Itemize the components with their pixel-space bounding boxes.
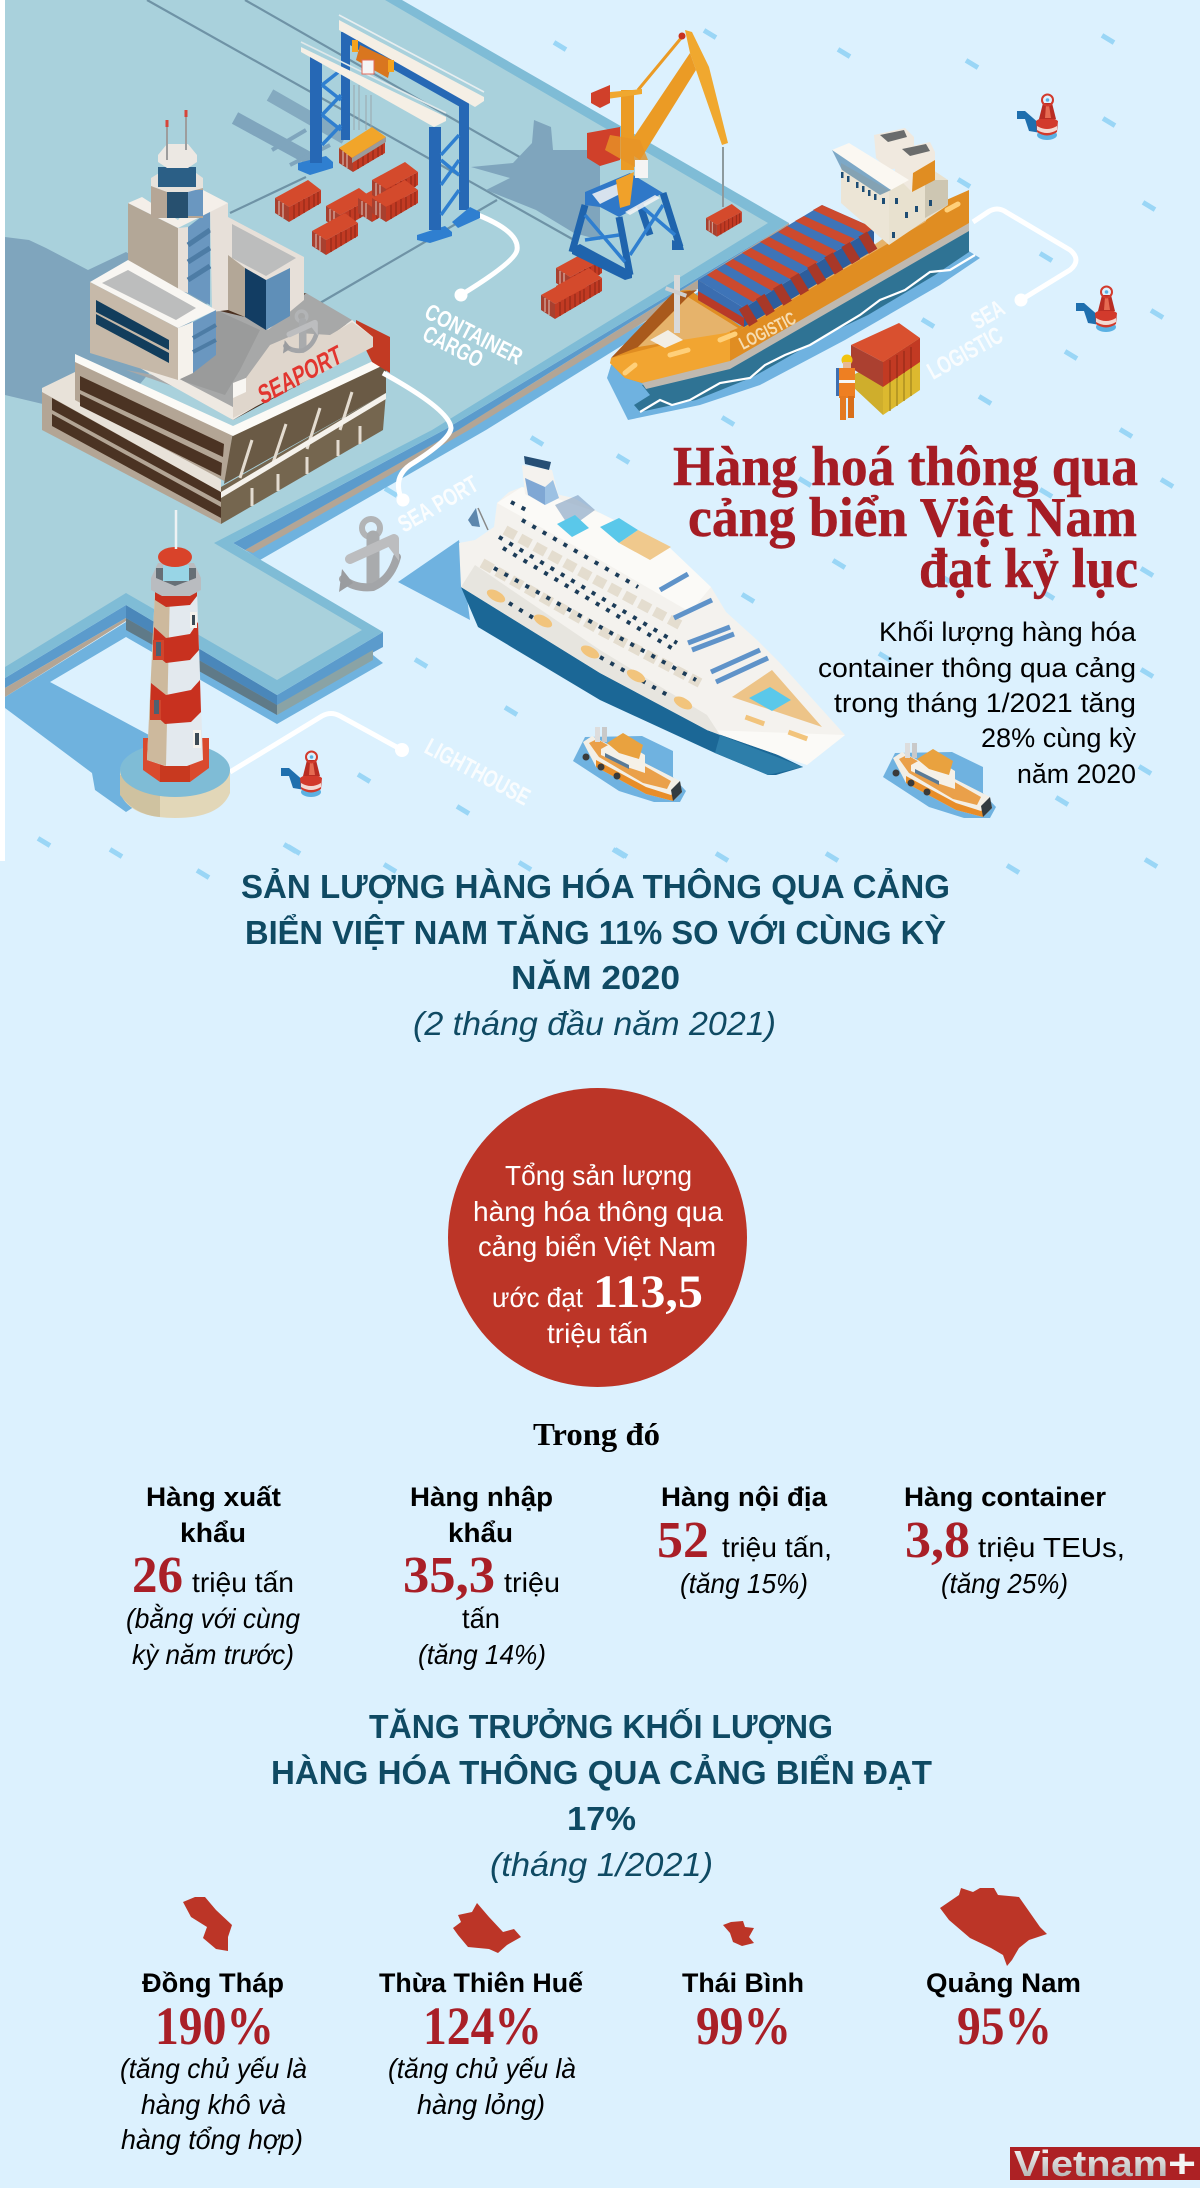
stat: export goods [126, 1482, 300, 1670]
stat: import goods: Hàng nhập [410, 1482, 553, 1512]
stat: Quang Nam: 95% [957, 1996, 1052, 2056]
stat: Thai Binh [682, 1921, 804, 2056]
icon: roof anchor [283, 311, 318, 354]
heading: main title: cảng biển Việt Nam [688, 487, 1137, 549]
label: lighthouse: LIGHTHOUSE [420, 733, 534, 811]
callout: total output circle: Tổng sản lượng [505, 1160, 692, 1191]
stat: Thua Thien Hue: hàng lỏng) [417, 2089, 545, 2120]
heading: growth section: HÀNG HÓA THÔNG QUA CẢNG BIỂN ĐẠT [271, 1753, 932, 1791]
heading: output section: SẢN LƯỢNG HÀNG HÓA THÔNG QUA CẢNG [241, 867, 950, 905]
heading: trong do: Trong đó [533, 1416, 660, 1452]
stat: Thai Binh: Thái Bình [682, 1968, 804, 1998]
stat: Thua Thien Hue: 124% [423, 1996, 542, 2056]
heading: main title: Hàng hoá thông qua [673, 436, 1138, 498]
heading: main title: đạt kỷ lục [919, 538, 1138, 600]
stat: Dong Thap: hàng khô và [141, 2089, 286, 2120]
text: SEAPORT sign: SEAPORT [255, 339, 345, 411]
stat: import goods: 35,3 [403, 1547, 495, 1604]
heading: output section: NĂM 2020 [511, 959, 680, 996]
sign facade [233, 322, 373, 418]
stat: export goods: Hàng xuất [146, 1482, 281, 1512]
lifeboats [485, 587, 694, 712]
stat: container goods: 3,8 [905, 1512, 970, 1569]
stat: import goods: triệu [504, 1567, 560, 1598]
window rows [494, 502, 696, 697]
label: lighthouse [230, 714, 534, 811]
main tower [128, 203, 178, 290]
stat: Dong Thap: hàng tổng hợp) [121, 2124, 303, 2155]
stat: Dong Thap: (tăng chủ yếu là [120, 2053, 307, 2084]
icon: Thua Thien Hue map [453, 1903, 521, 1953]
callout: total output circle: cảng biển Việt Nam [478, 1231, 716, 1262]
callout: total output circle: hàng hóa thông qua [473, 1196, 723, 1227]
icon: buoy lower [281, 752, 322, 797]
callout: total output circle: triệu tấn [547, 1318, 648, 1349]
stat: Thua Thien Hue [379, 1903, 584, 2120]
stat: domestic goods: 52 [657, 1512, 709, 1569]
stat: export goods: triệu tấn [192, 1567, 294, 1598]
stat: domestic goods: triệu tấn, [722, 1532, 832, 1563]
shadows on land [5, 95, 600, 420]
label: sea logistic: LOGISTIC [923, 322, 1008, 385]
stat: export goods: kỳ năm trước) [132, 1639, 294, 1670]
icon: seaport building [42, 110, 390, 524]
text block: intro: container thông qua cảng [818, 653, 1136, 683]
stat: container goods: Hàng container [904, 1482, 1107, 1512]
text: LOGISTIC hull lettering: LOGISTIC [736, 308, 799, 354]
stat: container goods [904, 1482, 1125, 1599]
crane legs [572, 190, 680, 275]
stat: domestic goods: (tăng 15%) [680, 1568, 808, 1599]
label: container cargo: CONTAINER [421, 298, 527, 370]
crane platform [585, 173, 663, 217]
stat: import goods: tấn [462, 1603, 500, 1634]
port land and quay [5, 0, 800, 812]
icon: lighthouse [120, 510, 230, 818]
stat: export goods: (bằng với cùng [126, 1603, 300, 1634]
upper tower [151, 183, 203, 218]
heading: growth section: 17% [567, 1800, 636, 1837]
heading: growth section: (tháng 1/2021) [490, 1846, 713, 1883]
logo: Vietnam+: + [1168, 2142, 1196, 2186]
stat: Dong Thap: Đồng Tháp [142, 1968, 284, 1998]
flag [468, 508, 480, 527]
icon: harbour crane [572, 30, 742, 280]
callout: total output circle: ước đạt [492, 1282, 583, 1313]
label: sea port [383, 373, 483, 538]
stat: Dong Thap: 190% [155, 1996, 274, 2056]
stat: export goods: khẩu [180, 1518, 246, 1548]
label: container cargo [419, 215, 527, 373]
rear block [228, 217, 304, 330]
icon: cargo ship [607, 128, 980, 420]
funnel [522, 465, 559, 505]
stat: Thai Binh: 99% [696, 1996, 791, 2056]
logo: Vietnam+ [1010, 2142, 1200, 2186]
stat: import goods: (tăng 14%) [418, 1639, 546, 1670]
icon: gantry crane [298, 15, 484, 243]
icon: cruise ship [398, 456, 845, 775]
stat: export goods: 26 [132, 1547, 183, 1604]
icon: Thai Binh map [723, 1921, 754, 1946]
left block [90, 282, 178, 380]
text block: intro: năm 2020 [1017, 759, 1136, 789]
icon: worker and containers [836, 323, 920, 420]
icon: anchor [339, 519, 399, 592]
label: container cargo: CARGO [419, 320, 488, 373]
superstructure [841, 163, 889, 245]
stat: import goods [403, 1482, 560, 1670]
text block: intro: trong tháng 1/2021 tăng [834, 688, 1136, 718]
white image margin [0, 0, 5, 861]
icon: buoy top [1017, 94, 1058, 140]
callout: total output circle: 113,5 [593, 1266, 703, 1318]
icon: Quang Nam map [940, 1888, 1047, 1966]
text block: intro [818, 617, 1137, 789]
bow deck [732, 670, 822, 727]
heading: output section [241, 867, 950, 1042]
stat: Thua Thien Hue: Thừa Thiên Huế [379, 1968, 584, 1998]
containers on deck [698, 205, 874, 327]
icon: container stacks [275, 162, 602, 319]
text block: intro: 28% cùng kỳ [981, 723, 1136, 753]
stat: domestic goods: Hàng nội địa [661, 1482, 828, 1512]
logo: Vietnam+: Vietnam [1014, 2143, 1168, 2184]
cream window bands [482, 530, 700, 683]
heading: growth section [271, 1707, 932, 1883]
heading: output section: BIỂN VIỆT NAM TĂNG 11% SO VỚI CÙNG KỲ [245, 914, 946, 951]
stat: container goods: triệu TEUs, [978, 1532, 1125, 1563]
stat: domestic goods [657, 1482, 832, 1599]
stat: Dong Thap [120, 1897, 307, 2155]
label: sea port: SEA PORT [394, 471, 483, 538]
callout: total output circle [448, 1088, 747, 1387]
label: sea logistic: SEA [966, 295, 1009, 335]
blue deck stripes [660, 574, 768, 682]
panel: hero illustration [5, 0, 1174, 880]
red container behind [356, 320, 390, 373]
icon: tugboat right [883, 743, 996, 818]
label: sea logistic [923, 209, 1076, 385]
roof interior [90, 293, 373, 420]
heading: growth section: TĂNG TRƯỞNG KHỐI LƯỢNG [369, 1707, 833, 1745]
stat: Quang Nam [926, 1888, 1081, 2056]
heading: main title [673, 436, 1138, 600]
text block: intro: Khối lượng hàng hóa [879, 617, 1137, 647]
base tier [42, 354, 386, 524]
icon: tugboat left [573, 727, 686, 802]
icon: buoy right [1076, 286, 1117, 332]
stat: Quang Nam: Quảng Nam [926, 1968, 1081, 1998]
heading: output section: (2 tháng đầu năm 2021) [413, 1005, 776, 1042]
stat: container goods: (tăng 25%) [941, 1568, 1068, 1599]
stat: Thua Thien Hue: (tăng chủ yếu là [388, 2053, 576, 2084]
ground markings [147, 0, 600, 303]
stat: import goods: khẩu [448, 1518, 513, 1548]
icon: Dong Thap map [183, 1897, 232, 1951]
water dashes [37, 28, 1174, 880]
